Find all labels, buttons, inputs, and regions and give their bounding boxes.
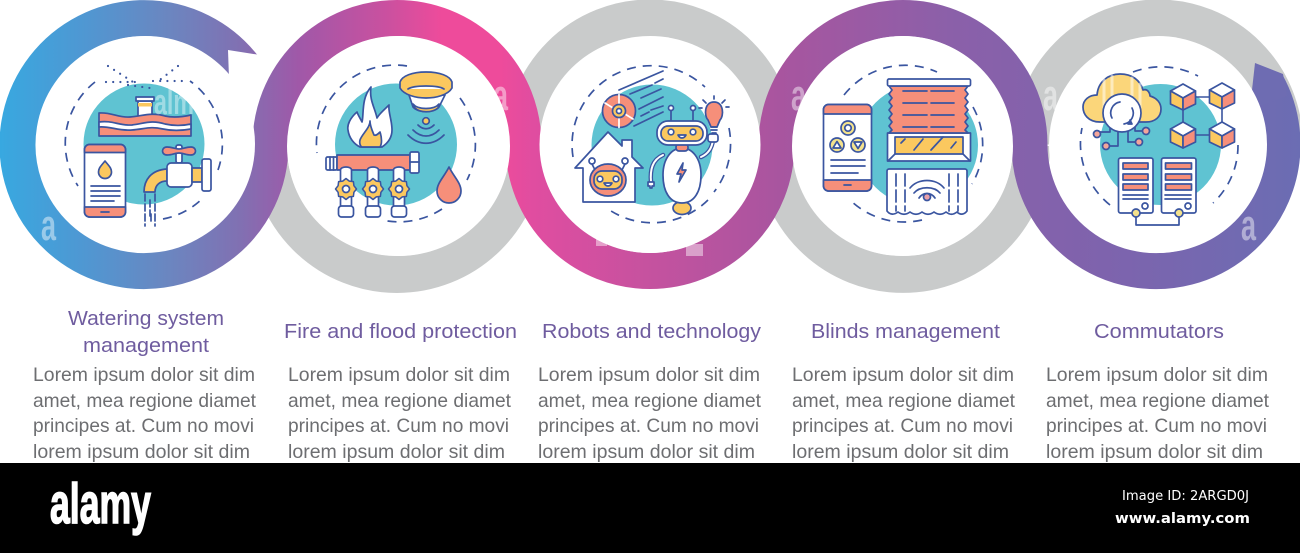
arrow notch: start of ribbon	[228, 50, 264, 88]
text block: column 5: Lorem ipsum dolor sit dim	[1046, 364, 1268, 386]
heading: robots and technology: Robots and technology	[542, 321, 761, 343]
watermark letters: a	[41, 201, 56, 250]
smoke sensor	[400, 72, 452, 143]
text block: column 1: Lorem ipsum dolor sit dim	[33, 364, 255, 386]
panel: watering system icon	[36, 36, 255, 252]
text block: column 2: Lorem ipsum dolor sit dim	[288, 364, 510, 386]
heading: commutators: Commutators	[1094, 321, 1224, 343]
text block: column 3	[538, 364, 762, 463]
watermark letters: a	[1241, 201, 1256, 250]
text block: column 3: Lorem ipsum dolor sit dim	[538, 364, 760, 386]
sprinkler spray	[106, 66, 185, 88]
dashed ring	[65, 81, 222, 219]
text block: column 4	[792, 364, 1016, 463]
heading: watering system management	[68, 308, 224, 357]
text block: column 5	[1046, 364, 1270, 463]
cube network	[1170, 83, 1234, 148]
watermark letters: a	[493, 71, 508, 120]
panel: commutators icon	[1049, 36, 1267, 253]
text block: column 2: principes at. Cum no movi	[288, 415, 509, 437]
window with blind	[888, 79, 970, 161]
text block: column 1: amet, mea regione diamet	[33, 390, 257, 412]
image id: Image ID: 2ARGD0J	[1122, 489, 1249, 504]
text block: column 3: lorem ipsum dolor sit dim	[538, 441, 755, 463]
dashed ring	[844, 65, 983, 222]
arrow end of ribbon	[1252, 63, 1287, 106]
watermark letters: a	[791, 71, 806, 120]
servers	[1118, 158, 1196, 225]
curtain with wifi	[887, 169, 967, 214]
watermark letters	[41, 71, 1256, 256]
text block: column 2: lorem ipsum dolor sit dim	[288, 441, 505, 463]
logo: alamy: alamy	[50, 472, 151, 536]
faint watermark: alm	[154, 81, 194, 122]
text block: column 1: principes at. Cum no movi	[33, 415, 254, 437]
text block: column 5: lorem ipsum dolor sit dim	[1046, 441, 1263, 463]
text block: column 1: lorem ipsum dolor sit dim	[33, 441, 250, 463]
faucet	[144, 145, 211, 226]
panel: blinds icon	[792, 36, 1013, 256]
flame	[348, 87, 392, 147]
dashed ring	[572, 66, 731, 223]
house with robot	[575, 132, 643, 202]
heading: fire and flood protection: Fire and flood protection	[284, 321, 517, 343]
big robot	[648, 106, 718, 214]
light bulb	[699, 96, 729, 133]
text block: column 4: principes at. Cum no movi	[792, 415, 1013, 437]
heading: blinds management: Blinds management	[811, 321, 1000, 343]
heading: watering system management: management	[83, 335, 209, 357]
footer bar	[0, 463, 1300, 553]
soil and nozzle	[99, 97, 191, 136]
text block: column 4: amet, mea regione diamet	[792, 390, 1016, 412]
text block: column 3: principes at. Cum no movi	[538, 415, 759, 437]
text block: column 5: principes at. Cum no movi	[1046, 415, 1267, 437]
manifold	[326, 152, 419, 217]
speed lines	[619, 71, 663, 126]
panel: fire and flood icon	[287, 36, 510, 256]
disk	[602, 94, 636, 128]
text block: column 3: amet, mea regione diamet	[538, 390, 762, 412]
heading: watering system management: Watering system	[68, 308, 224, 330]
text block: column 1	[33, 364, 257, 463]
cloud	[1083, 74, 1161, 150]
dashed ring	[316, 65, 475, 222]
water drop	[437, 167, 461, 203]
phone	[84, 144, 126, 217]
text block: column 4: Lorem ipsum dolor sit dim	[792, 364, 1014, 386]
text block: column 4: lorem ipsum dolor sit dim	[792, 441, 1009, 463]
grey background rings	[268, 18, 1284, 274]
phone remote	[824, 104, 872, 191]
text block: column 5: amet, mea regione diamet	[1046, 390, 1270, 412]
dashed ring	[1080, 67, 1238, 205]
site url: www.alamy.com	[1115, 511, 1250, 527]
panel: robots icon	[540, 36, 760, 253]
text block: column 2: amet, mea regione diamet	[288, 390, 512, 412]
text block: column 2	[288, 364, 512, 463]
gradient ribbon	[18, 18, 1283, 271]
watermark letters: a	[1043, 71, 1058, 120]
